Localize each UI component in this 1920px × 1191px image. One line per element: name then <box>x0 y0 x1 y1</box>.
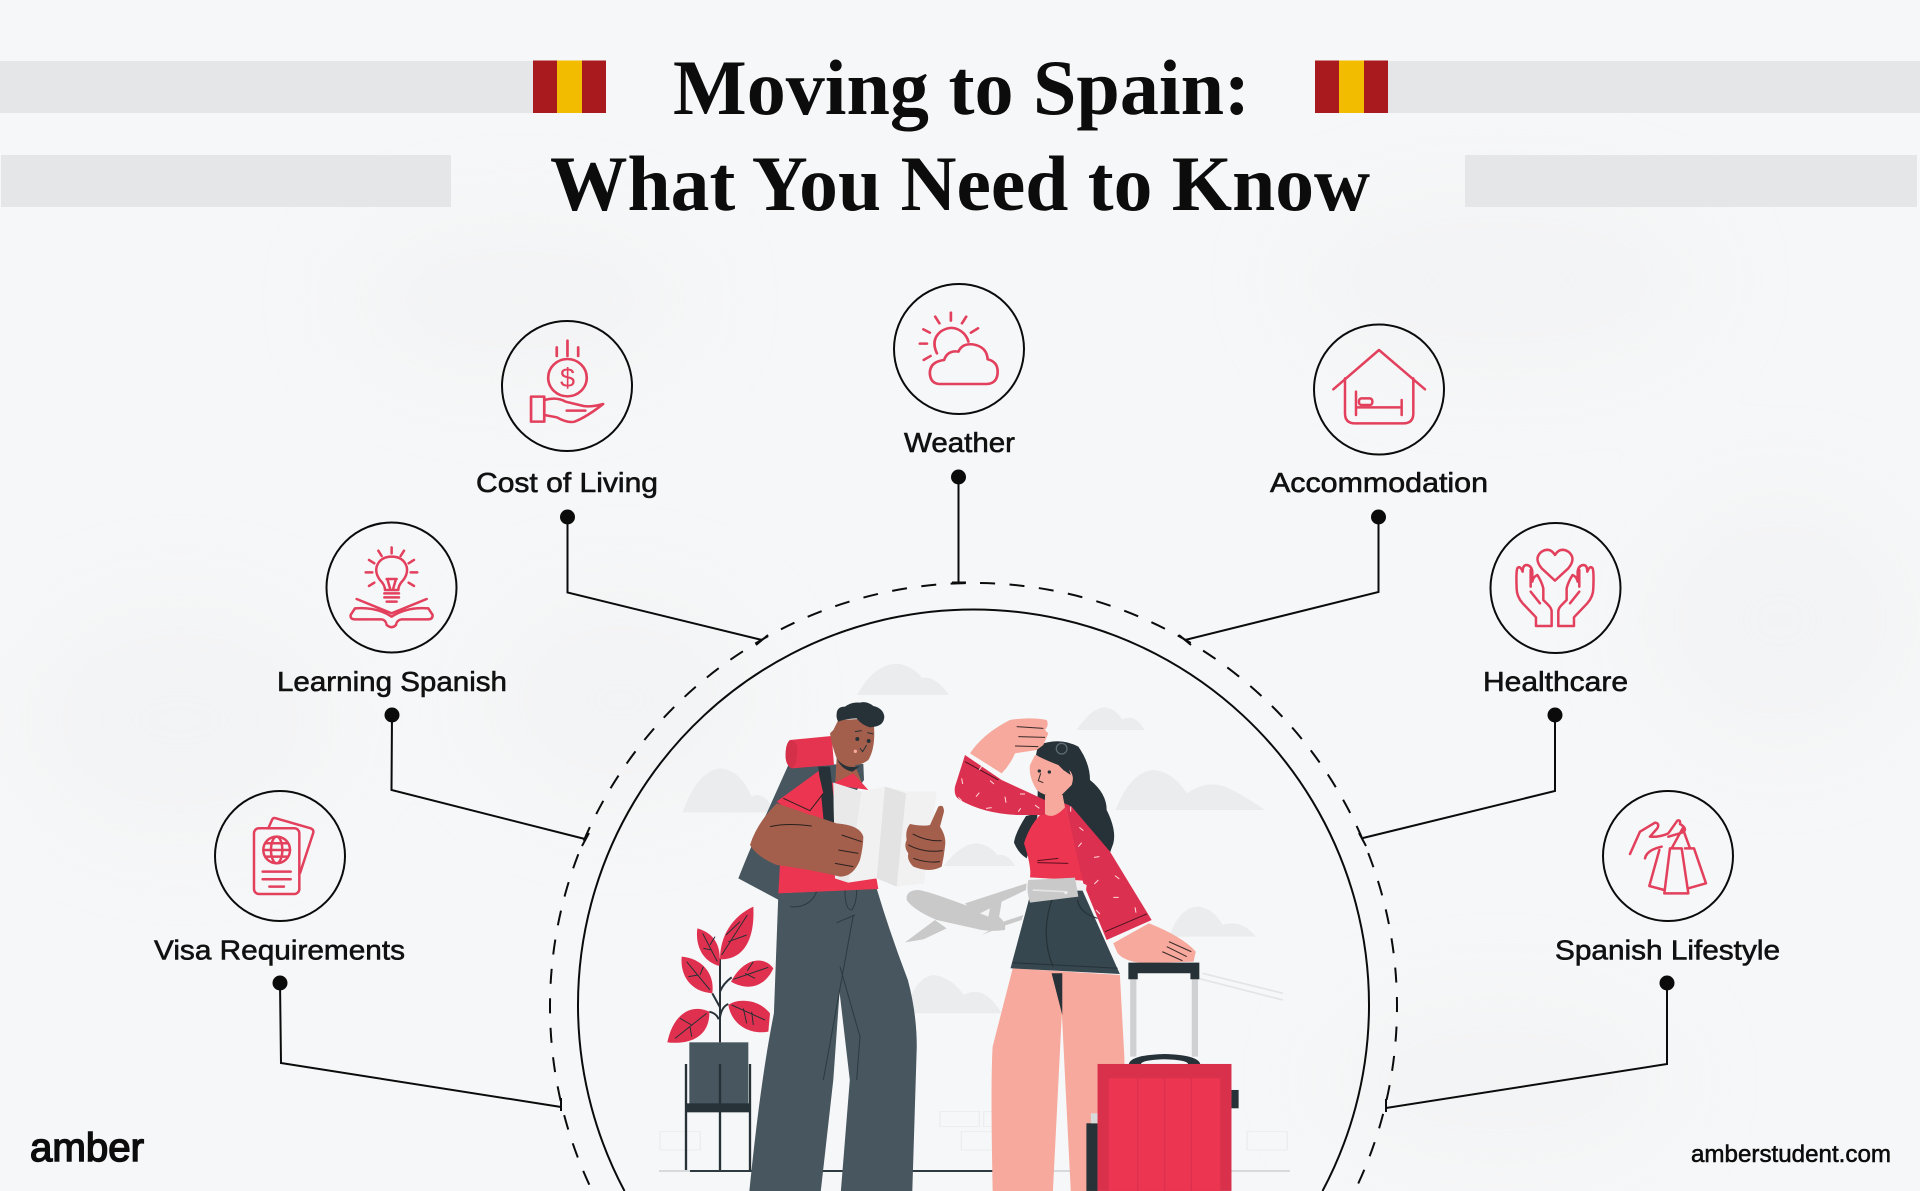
title: Moving to Spain: <box>673 44 1250 131</box>
man trouser seams <box>790 890 860 1080</box>
illustration: ground line <box>659 1170 1290 1172</box>
icon: Spanish flag left <box>533 60 606 113</box>
illustration: potted plant <box>667 907 773 1170</box>
man upper body <box>738 702 945 901</box>
title <box>550 44 1370 227</box>
illustration: clouds and background <box>660 664 1287 1150</box>
bars left <box>0 61 533 207</box>
topic: Learning Spanish <box>277 522 589 846</box>
label: Accommodation <box>1270 467 1488 498</box>
topic: Accommodation <box>1179 324 1488 645</box>
topic: Cost of Living <box>476 321 768 645</box>
suitcase <box>1086 963 1239 1191</box>
icon: hand with shopping bags <box>1603 791 1733 921</box>
dashed and solid hub arcs <box>550 583 1397 1191</box>
icon: sun behind cloud <box>894 284 1024 414</box>
topic: Weather <box>894 284 1024 582</box>
label: Spanish Lifestyle <box>1555 934 1780 966</box>
topic: Visa Requirements <box>154 791 561 1111</box>
woman legs and shorts <box>992 889 1196 1191</box>
icon: lightbulb over book <box>326 522 456 652</box>
illustration: man with map <box>738 702 945 1191</box>
connector <box>951 470 966 582</box>
label: Learning Spanish <box>277 666 507 697</box>
connector <box>1359 708 1562 846</box>
connector <box>272 976 561 1111</box>
icon: hands holding heart <box>1490 523 1620 653</box>
label: Cost of Living <box>476 467 658 498</box>
icon: passports <box>215 791 345 921</box>
header banner <box>0 44 1920 227</box>
man legs <box>749 888 917 1191</box>
connector <box>1179 510 1386 645</box>
label: Weather <box>904 427 1015 458</box>
icon: coin over hand: $ <box>560 363 575 393</box>
topic: Spanish Lifestyle <box>1386 791 1780 1112</box>
title: What You Need to Know <box>550 140 1370 227</box>
icon: coin over hand <box>502 321 632 451</box>
connector <box>560 510 768 645</box>
connector <box>384 708 589 846</box>
label: Healthcare <box>1483 666 1628 697</box>
website: amberstudent.com <box>1691 1141 1891 1168</box>
bars right <box>1388 61 1920 207</box>
label: Visa Requirements <box>154 934 405 966</box>
woman upper body <box>955 718 1152 940</box>
logo: amber: amber <box>30 1126 144 1170</box>
icon: Spanish flag right <box>1315 60 1388 113</box>
icon: house with bed <box>1314 324 1444 454</box>
illustration: airplane <box>905 883 1027 942</box>
topic: Healthcare <box>1359 523 1628 846</box>
illustration: woman with suitcase <box>955 718 1239 1191</box>
connector <box>1386 976 1674 1112</box>
